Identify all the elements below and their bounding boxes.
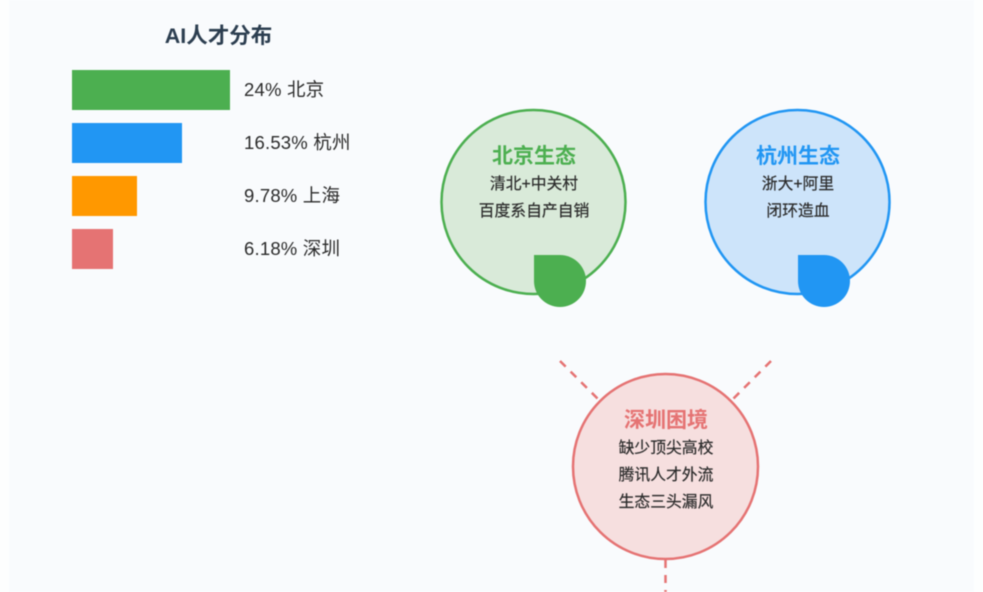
bar row: Hangzhou	[72, 123, 351, 163]
dashed connectors	[560, 361, 771, 592]
text: Hangzhou details: 闭环造血	[766, 202, 830, 220]
text: Beijing details: 百度系自产自销	[479, 202, 589, 220]
bar row: Beijing: 24% 北京	[244, 79, 324, 100]
title: AI人才分布	[165, 24, 272, 48]
text: Shenzhen details: 腾讯人才外流	[619, 466, 714, 484]
icon: blue drop	[798, 255, 850, 307]
heading: Hangzhou ecosystem: 杭州生态	[756, 144, 840, 168]
icon: green drop	[534, 255, 586, 307]
bar row: Hangzhou: 16.53% 杭州	[244, 132, 351, 153]
heading: Beijing ecosystem: 北京生态	[492, 144, 576, 168]
bar row: Shanghai	[72, 176, 340, 216]
bar row: Shenzhen: 6.18% 深圳	[244, 238, 340, 259]
text: Hangzhou details	[762, 175, 834, 220]
bar row: Shanghai: 9.78% 上海	[244, 185, 340, 206]
text: Shenzhen details	[619, 439, 714, 511]
panel: Shenzhen predicament	[573, 374, 758, 559]
panel: Beijing ecosystem	[442, 110, 626, 307]
heading: Shenzhen predicament: 深圳困境	[624, 409, 708, 432]
bar row: Shenzhen	[72, 229, 340, 269]
bar row: Beijing	[72, 70, 324, 110]
text: Hangzhou details: 浙大+阿里	[762, 175, 834, 193]
text: Beijing details: 清北+中关村	[490, 175, 578, 193]
text: Shenzhen details: 缺少顶尖高校	[619, 439, 714, 457]
panel: Hangzhou ecosystem	[706, 110, 890, 307]
text: Beijing details	[479, 175, 589, 220]
bar chart: AI talent distribution	[72, 70, 351, 269]
text: Shenzhen details: 生态三头漏风	[619, 493, 714, 511]
